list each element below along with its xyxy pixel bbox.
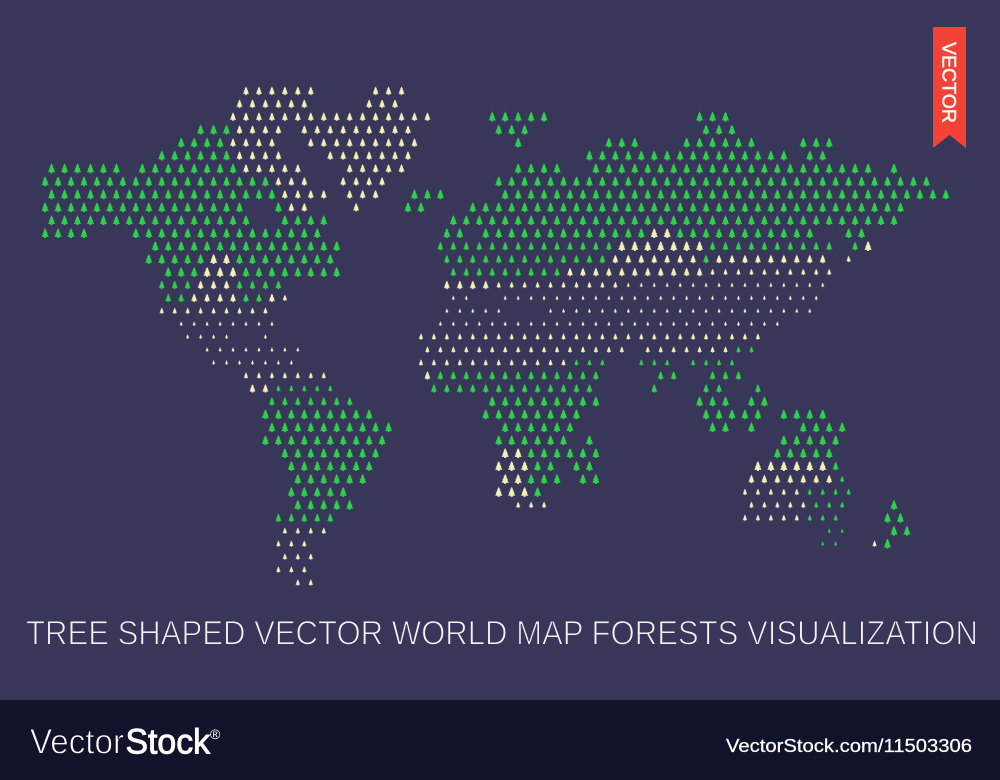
footer image id: VectorStock.com/11503306: [726, 735, 972, 756]
region: Iceland and Svalbard islands: [402, 110, 551, 214]
ribbon badge: VECTOR: [933, 27, 966, 148]
footer logo: VectorStock: Vector: [30, 722, 124, 762]
footer bar: [0, 700, 1000, 780]
footer logo: VectorStock: Stock: [126, 722, 210, 762]
region: Australia: [738, 408, 855, 550]
region: New Zealand: [868, 498, 913, 550]
ribbon badge: VECTOR: VECTOR: [938, 42, 958, 123]
footer logo: VectorStock: ®: [210, 726, 221, 742]
region: South America: [259, 382, 395, 589]
region: Africa: [479, 395, 602, 511]
region: Eurasia: [414, 110, 952, 434]
region: North America and Arctic Canada: [39, 84, 434, 395]
footer logo: VectorStock: [30, 722, 221, 762]
world map of tree icons: [39, 84, 952, 589]
